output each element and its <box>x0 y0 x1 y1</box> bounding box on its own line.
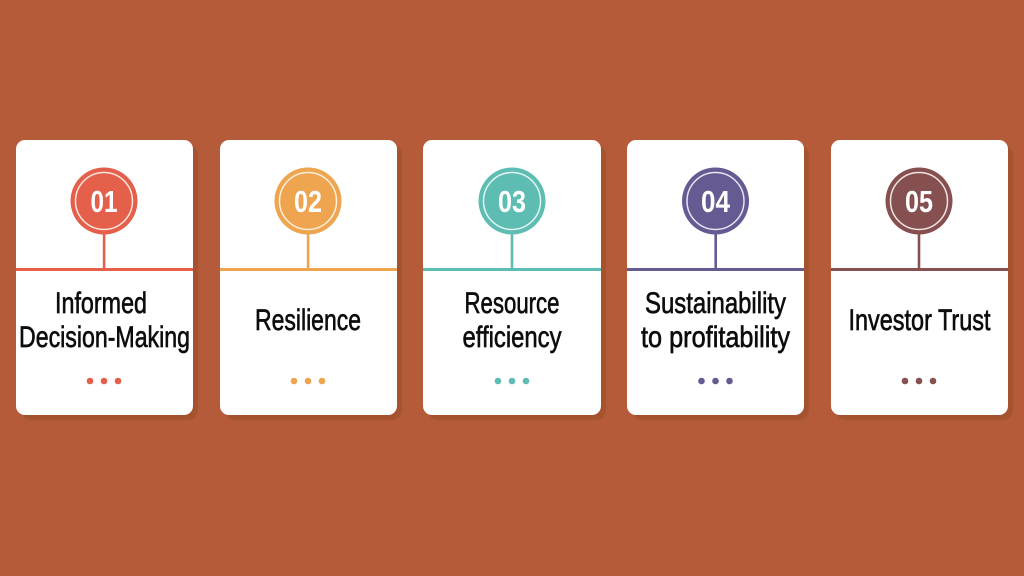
dots: card 5 <box>902 378 936 384</box>
icon: number badge 02 <box>274 168 342 234</box>
heading: card 3 label: Resource <box>464 287 560 320</box>
heading: card 1 label: Decision-Making <box>19 321 190 354</box>
dots: card 2 <box>291 378 325 384</box>
panel: card 2 <box>220 140 402 420</box>
icon: number badge 01: 01 <box>90 184 118 219</box>
heading: card 4 label: Sustainability <box>645 287 786 320</box>
heading: card 1 label <box>19 287 190 354</box>
icon: number badge 01 <box>70 168 138 234</box>
heading: card 4 label <box>641 287 790 354</box>
dots: card 3 <box>495 378 529 384</box>
icon: number badge 03 <box>478 168 546 234</box>
icon: number badge 04: 04 <box>701 184 731 219</box>
dots: card 1 <box>87 378 121 384</box>
panel: card 4 <box>627 140 809 420</box>
icon: number badge 04 <box>682 168 749 234</box>
icon: number badge 02: 02 <box>294 184 322 219</box>
dots: card 4 <box>698 378 733 384</box>
heading: card 4 label: to profitability <box>641 321 790 354</box>
heading: card 1 label: Informed <box>55 287 147 320</box>
icon: number badge 03: 03 <box>498 184 526 219</box>
heading: card 3 label: efficiency <box>462 321 562 354</box>
panel: card 1 <box>16 140 198 420</box>
icon: number badge 05 <box>886 168 952 234</box>
heading: card 2 label: Resilience <box>255 304 361 337</box>
panel: card 3 <box>423 140 606 420</box>
icon: number badge 05: 05 <box>905 184 933 219</box>
panel: card 5 <box>831 140 1013 420</box>
heading: card 3 label <box>462 287 562 354</box>
